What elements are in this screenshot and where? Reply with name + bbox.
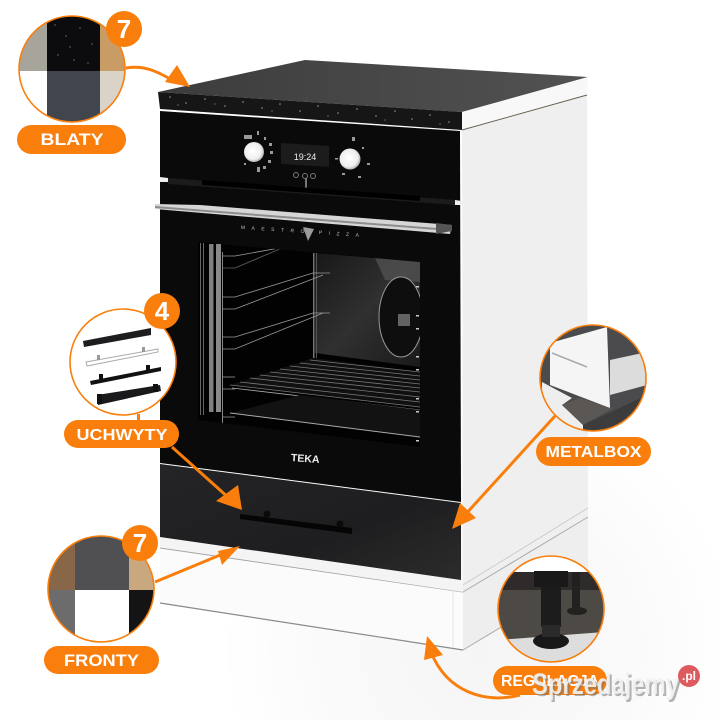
label <box>493 666 607 695</box>
label <box>536 437 651 466</box>
arrow <box>172 447 242 510</box>
label <box>44 646 159 674</box>
count badge <box>144 293 180 329</box>
oven vent slots <box>202 180 420 201</box>
label <box>64 414 179 448</box>
rack rails <box>223 232 330 417</box>
label: FRONTY <box>64 651 140 670</box>
arrow <box>155 546 240 582</box>
left door strips <box>200 243 317 424</box>
count badge: 7 <box>117 14 131 44</box>
callout: FRONTY <box>44 525 240 674</box>
callout: METALBOX <box>452 325 651 529</box>
adjustable foot circle <box>498 556 604 662</box>
swatch circle <box>48 536 155 642</box>
cabinet with oven <box>155 60 588 650</box>
arrow <box>452 416 555 529</box>
arrow <box>424 636 520 698</box>
oven window <box>198 232 423 447</box>
oven handle <box>155 204 452 234</box>
callout: REGULACJA <box>424 556 607 698</box>
white band under drawer <box>160 537 463 592</box>
drawer front <box>160 464 461 580</box>
icon: pizza slice <box>303 227 314 241</box>
plinth front <box>160 547 463 650</box>
handles circle <box>70 309 176 415</box>
oven controls <box>244 131 370 190</box>
oven front <box>160 111 461 502</box>
count badge: 7 <box>133 528 147 558</box>
count badge <box>106 11 142 47</box>
label: METALBOX <box>546 444 642 461</box>
left knob <box>244 142 264 162</box>
drawer handle <box>240 510 352 534</box>
count badge <box>122 525 158 561</box>
count badge: 4 <box>155 296 170 326</box>
back wall <box>315 253 420 367</box>
drawer photo circle <box>540 325 647 432</box>
baking tray <box>230 395 420 437</box>
swatch circle <box>19 16 126 123</box>
control panel gaps <box>160 177 168 182</box>
fan <box>379 277 423 357</box>
.pl badge: .pl <box>682 669 696 683</box>
right knob <box>340 148 360 170</box>
right side ticks <box>416 286 419 442</box>
.pl badge <box>678 665 700 687</box>
brand: TEKA: TEKA <box>291 452 320 466</box>
brand line: MAESTRO PIZZA <box>241 225 366 239</box>
cabinet side panel <box>462 95 588 592</box>
plinth side <box>463 517 588 650</box>
watermark: Sprzedajemy.pl: Sprzedajemy <box>534 670 681 703</box>
wire shelf <box>230 360 420 410</box>
floor shadow <box>220 390 720 720</box>
label <box>17 125 126 154</box>
callout: BLATY <box>17 11 190 154</box>
display time: 19:24 <box>294 152 316 162</box>
callout: UCHWYTY <box>64 293 242 510</box>
label: UCHWYTY <box>76 427 168 444</box>
watermark: Sprzedajemy.pl: Sprzedajemy <box>532 668 679 701</box>
label: REGULACJA <box>501 673 599 690</box>
arrow <box>126 65 190 87</box>
oven floor <box>230 358 420 408</box>
label: BLATY <box>40 130 104 149</box>
countertop <box>158 60 588 130</box>
